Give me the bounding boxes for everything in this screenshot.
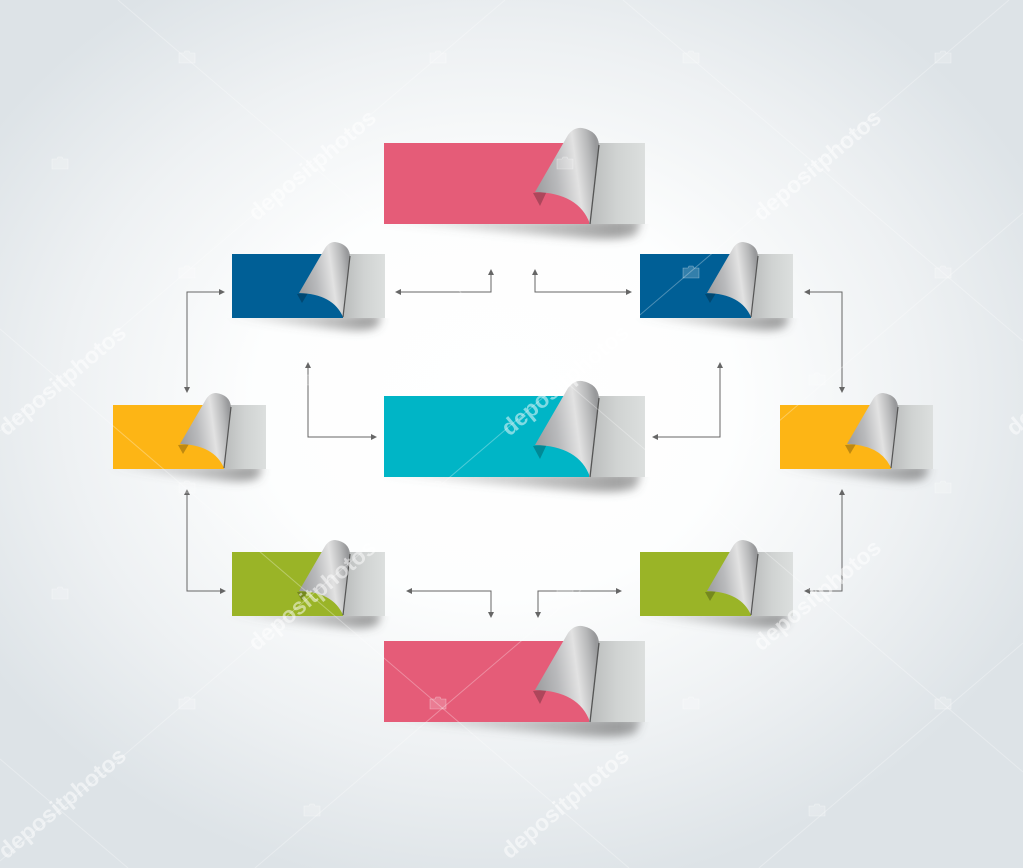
watermark text: depositphotos: [748, 104, 886, 226]
arrow: top to blue right: [532, 269, 632, 295]
watermark text: depositphotos: [243, 534, 381, 656]
watermark text: depositphotos: [243, 104, 381, 226]
card: right yellow: [780, 393, 933, 482]
arrow: blue right to yellow right: [804, 289, 845, 393]
arrow: blue left to yellow left: [184, 289, 225, 393]
card: centre teal: [384, 381, 645, 492]
card: upper right blue: [640, 242, 793, 331]
card: bottom pink: [384, 626, 645, 737]
watermark text: depositphotos: [496, 742, 634, 864]
card: upper left blue: [232, 242, 385, 331]
arrow: blue left to top: [395, 269, 494, 295]
arrow: green right to bottom: [535, 588, 622, 618]
card: lower left green: [232, 540, 385, 629]
card: top pink: [384, 128, 645, 239]
arrow: yellow left to green left: [184, 489, 226, 594]
arrow: centre to blue right: [652, 362, 723, 440]
watermark camera icons: [52, 51, 951, 816]
card: lower right green: [640, 540, 793, 629]
watermark text: depositphotos: [748, 534, 886, 656]
card: left yellow: [113, 393, 266, 482]
arrow: green left to bottom: [406, 588, 494, 618]
arrow: centre to blue left: [305, 362, 377, 440]
arrow: yellow right to green right: [804, 489, 845, 594]
watermark text: depositphotos: [496, 319, 634, 441]
